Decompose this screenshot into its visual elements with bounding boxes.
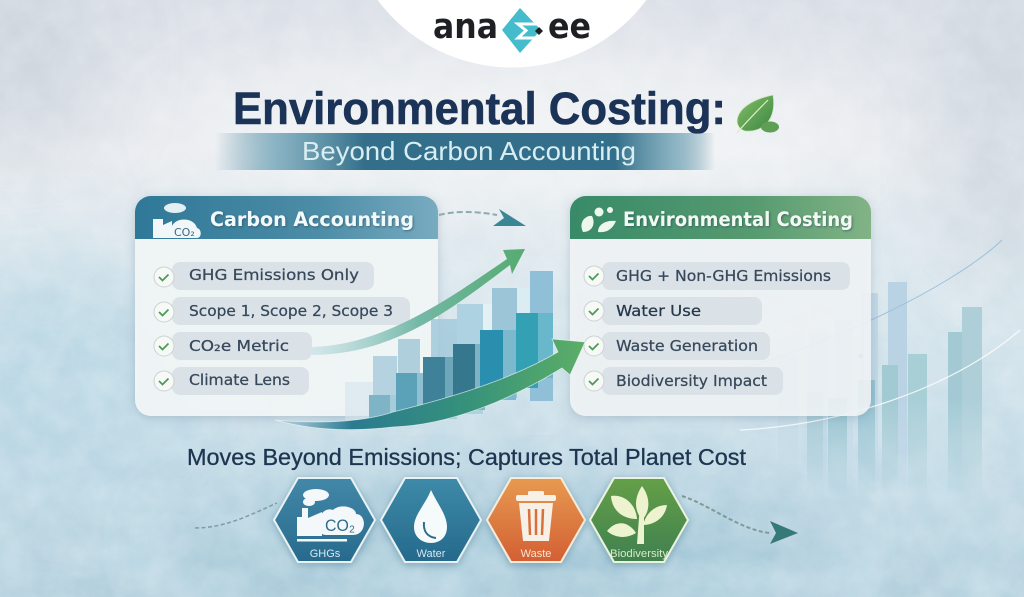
hexagon: Biodiversity bbox=[590, 478, 688, 562]
row: Biodiversity Impact bbox=[584, 367, 783, 395]
title: Environmental Costing: bbox=[233, 83, 726, 134]
row: Waste Generation: Waste Generation bbox=[616, 337, 758, 355]
hexagon: GHGs: CO₂ bbox=[325, 516, 355, 535]
row: GHG + Non-GHG Emissions: GHG + Non-GHG Emissions bbox=[616, 267, 831, 285]
logo wordmark ana: ana bbox=[433, 7, 498, 47]
row: Biodiversity Impact: Biodiversity Impact bbox=[616, 372, 767, 390]
panel header bbox=[135, 196, 438, 239]
chart: right background bars bbox=[789, 282, 982, 480]
icon: water drop bbox=[414, 490, 447, 543]
panel heading: Environmental Costing bbox=[623, 208, 853, 231]
dashed line with arrow: right bbox=[682, 496, 798, 544]
row: Climate Lens: Climate Lens bbox=[189, 371, 290, 389]
hexagon: Waste: Waste bbox=[521, 548, 551, 560]
row: Water Use: Water Use bbox=[616, 302, 701, 320]
section statement: Moves Beyond Emissions; Captures Total Planet Cost bbox=[187, 444, 747, 470]
icon: factory with CO2 cloud bbox=[297, 489, 364, 542]
panel: environmental costing bbox=[570, 196, 871, 416]
logo wordmark ee: ee bbox=[548, 7, 591, 47]
row: Water Use bbox=[584, 297, 762, 325]
subtitle: Beyond Carbon Accounting bbox=[302, 136, 636, 166]
panel heading: Carbon Accounting bbox=[210, 208, 414, 231]
hexagon: Waste bbox=[487, 478, 585, 562]
row: GHG Emissions Only bbox=[154, 262, 374, 290]
arrow: large green rising bbox=[275, 339, 585, 430]
subtitle band bbox=[215, 133, 715, 170]
arrow: dashed top bbox=[439, 209, 526, 226]
panel: carbon accounting bbox=[135, 196, 438, 416]
hexagon: GHGs bbox=[274, 478, 375, 562]
arrow: thin green rising bbox=[312, 249, 525, 355]
row: CO2e Metric bbox=[154, 332, 312, 360]
icon: seedling bbox=[607, 486, 667, 544]
row: Scope 1, Scope 2, Scope 3 bbox=[154, 297, 410, 325]
logo dot bbox=[535, 27, 543, 35]
logo diamond mark bbox=[502, 8, 540, 53]
icon: factory CO2: CO₂ bbox=[174, 226, 195, 239]
hexagon: Water: Water bbox=[417, 548, 446, 560]
hexagon: Water bbox=[381, 478, 481, 562]
panel header bbox=[570, 196, 871, 239]
logo badge bbox=[344, 0, 680, 68]
chart: curved trend lines bbox=[700, 240, 1020, 430]
dashed line: left bbox=[195, 503, 277, 528]
hexagon: Biodiversity: Biodiversity bbox=[610, 548, 669, 560]
chart: central bars bbox=[345, 271, 553, 420]
row: CO2e Metric: CO₂e Metric bbox=[189, 337, 289, 355]
icon: leaf bbox=[737, 95, 779, 133]
row: GHG Emissions Only: GHG Emissions Only bbox=[189, 266, 359, 284]
icon: leaves and flower bbox=[581, 207, 616, 232]
row: Scope 1, Scope 2, Scope 3: Scope 1, Scope 2, Scope 3 bbox=[189, 302, 393, 320]
icon: factory CO2 bbox=[153, 203, 201, 239]
row: Waste Generation bbox=[584, 332, 770, 360]
row: GHG + Non-GHG Emissions bbox=[584, 262, 850, 290]
row: Climate Lens bbox=[154, 367, 309, 395]
hexagon: GHGs: GHGs bbox=[310, 548, 341, 560]
icon: trash bin bbox=[516, 491, 556, 541]
